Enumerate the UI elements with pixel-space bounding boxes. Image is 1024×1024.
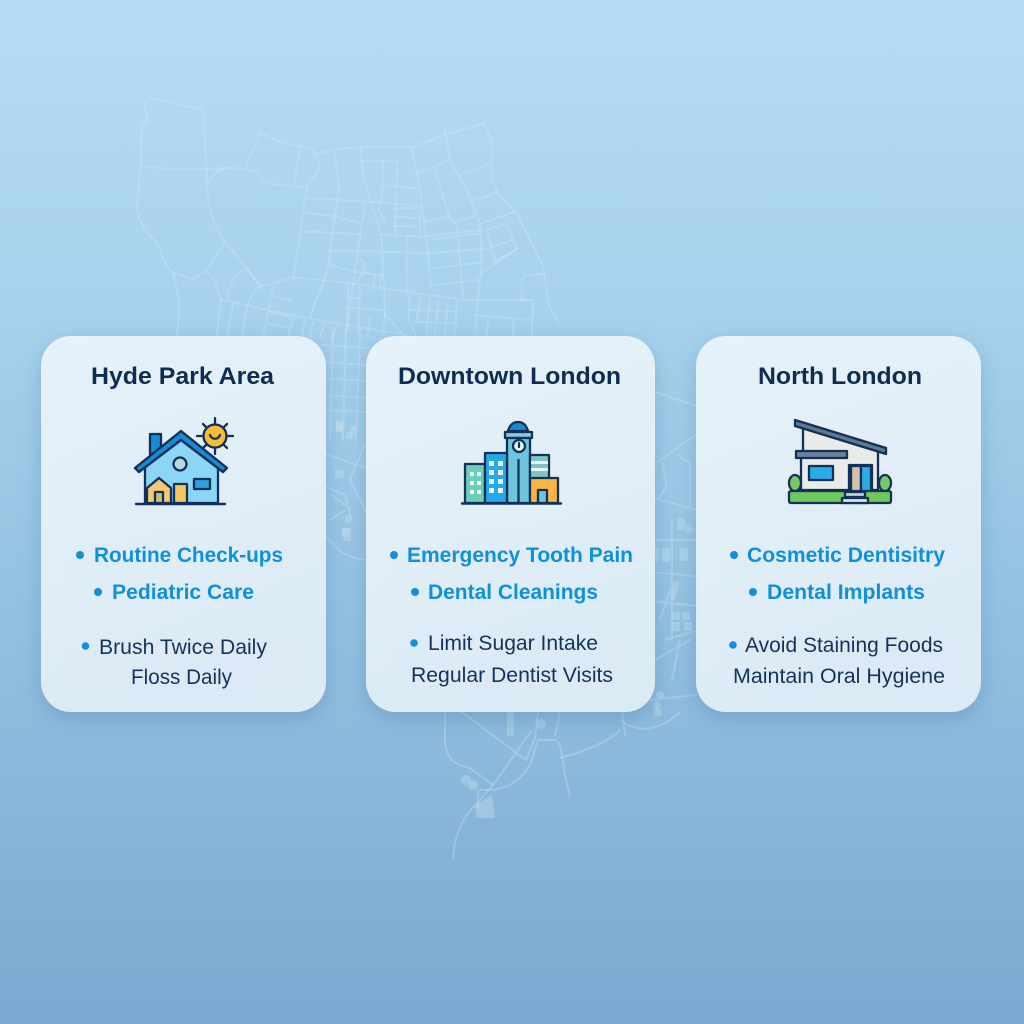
tips list: Maintain Oral Hygiene — [733, 665, 945, 688]
tips list — [82, 636, 267, 689]
tips list — [729, 634, 945, 688]
tips list — [410, 632, 613, 687]
panel: North London — [696, 336, 981, 712]
gap between first two cards — [322, 330, 368, 440]
tips list: Limit Sugar Intake — [428, 632, 598, 655]
services list: Cosmetic Dentisitry — [747, 544, 945, 567]
icon: city buildings with clock tower — [462, 422, 561, 504]
heading: North London: North London — [758, 363, 922, 390]
services list: Emergency Tooth Pain — [407, 544, 633, 567]
heading: Hyde Park Area: Hyde Park Area — [91, 363, 275, 390]
services list — [730, 544, 945, 604]
services list: Dental Cleanings — [428, 581, 598, 604]
panel: Hyde Park Area — [41, 336, 326, 712]
tips list: Avoid Staining Foods — [745, 634, 943, 657]
panel: Downtown London — [366, 336, 655, 712]
services list: Routine Check-ups — [94, 544, 283, 567]
tips list: Regular Dentist Visits — [411, 664, 613, 687]
services list — [390, 544, 633, 604]
services list — [76, 544, 283, 604]
street map watermark — [137, 98, 700, 858]
tips list: Floss Daily — [131, 666, 232, 689]
icon: modern house with garden — [789, 420, 891, 503]
heading: Downtown London: Downtown London — [398, 363, 621, 390]
services list: Dental Implants — [767, 581, 925, 604]
tips list: Brush Twice Daily — [99, 636, 267, 659]
below the cards — [445, 712, 493, 785]
services list: Pediatric Care — [112, 581, 254, 604]
building windows — [470, 461, 548, 494]
icon: house with sun — [135, 418, 233, 504]
gap between second and third cards — [655, 392, 696, 510]
